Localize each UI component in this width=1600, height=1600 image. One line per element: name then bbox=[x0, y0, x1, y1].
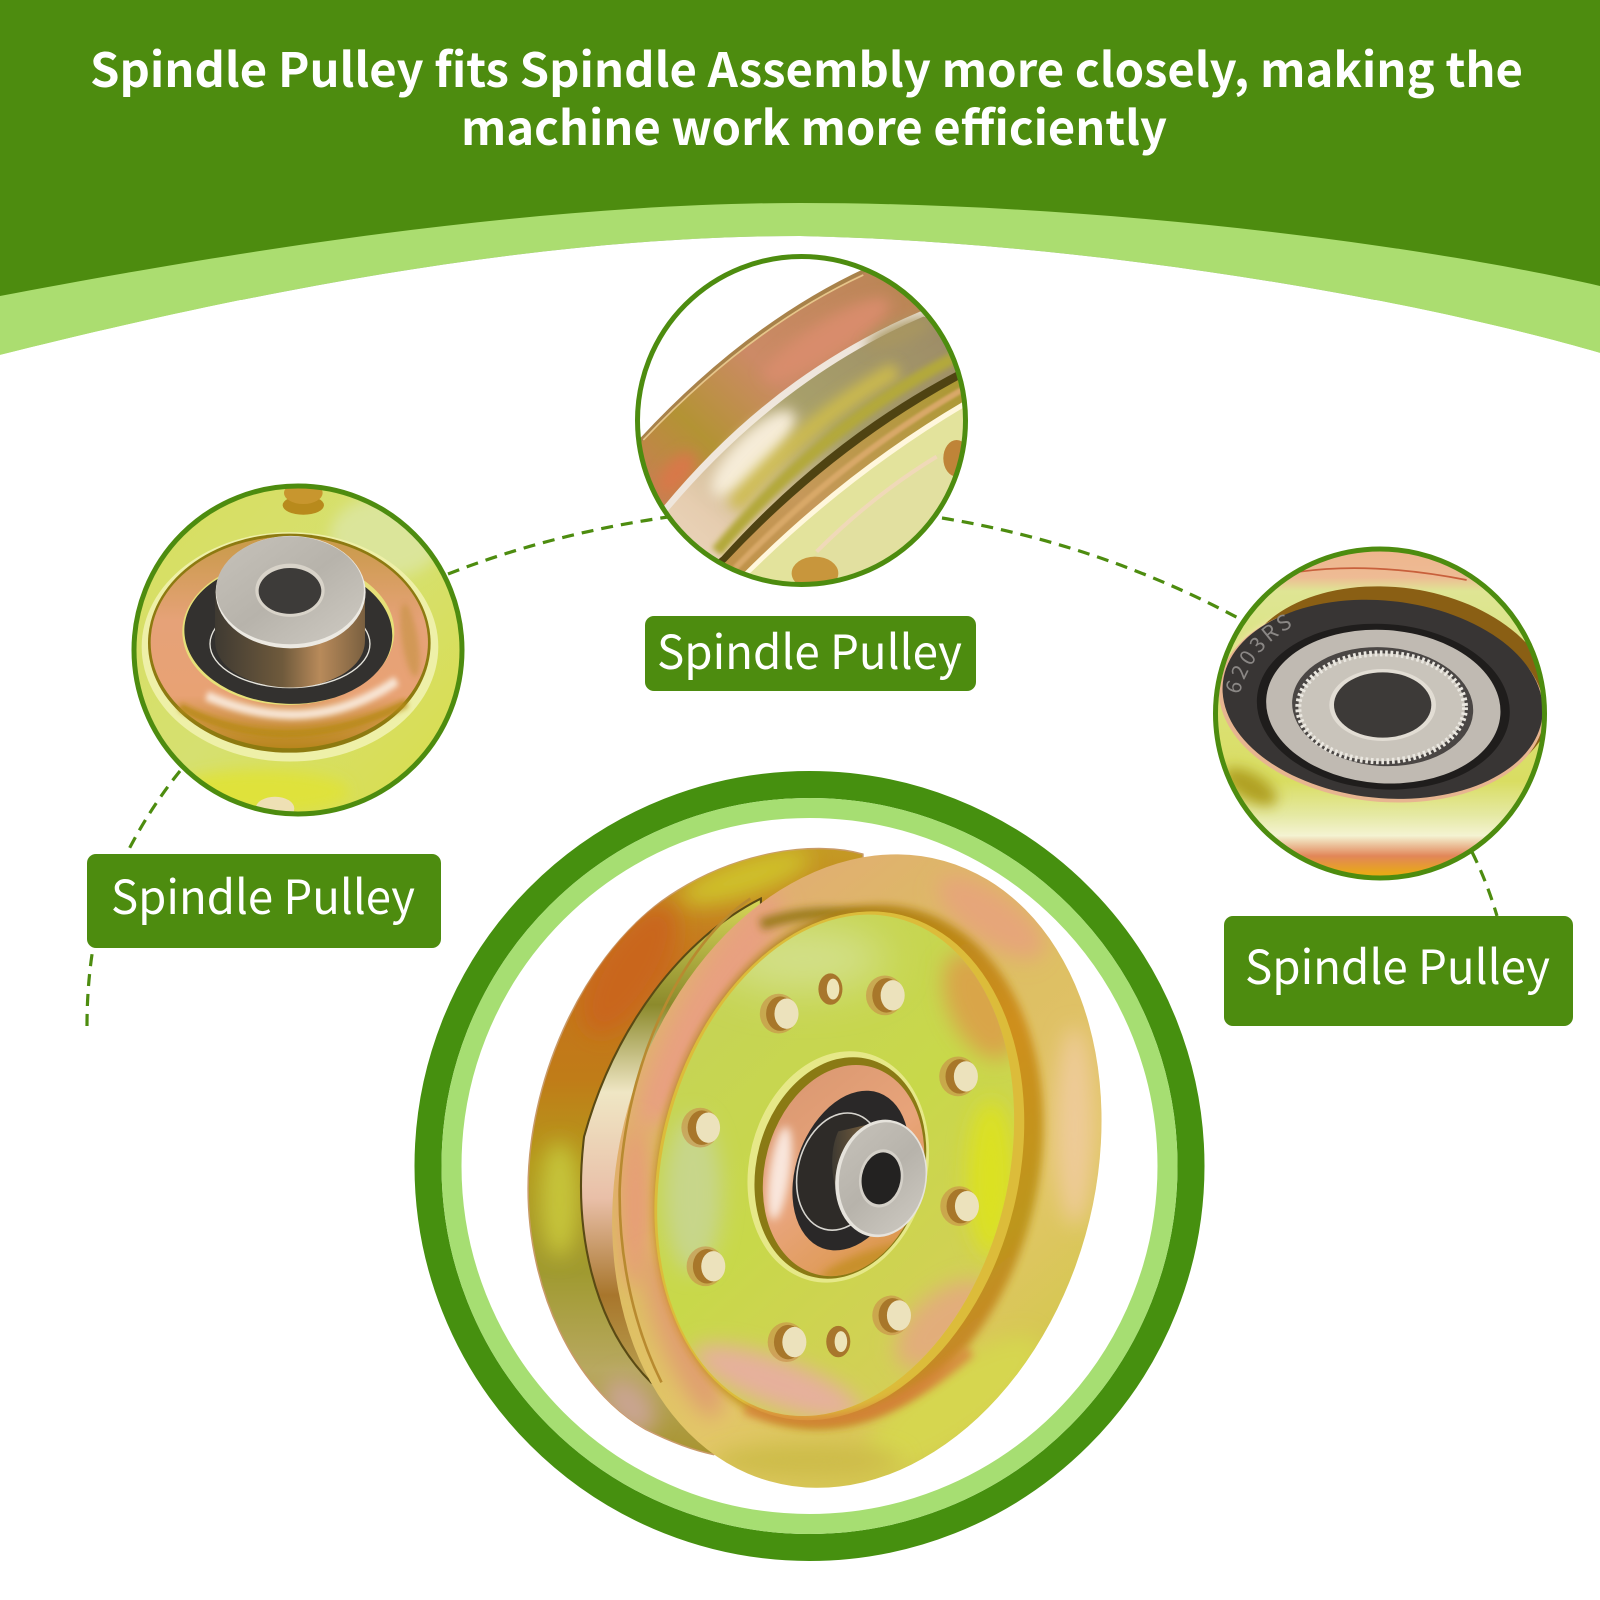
black bearing bbox=[182, 576, 394, 705]
central hub bbox=[748, 1051, 929, 1283]
detail circle: left, hub bbox=[127, 477, 470, 822]
dashed connector arc bbox=[87, 517, 1497, 1026]
bottom rivet bbox=[256, 796, 294, 812]
title bbox=[90, 32, 1523, 159]
label: left bbox=[87, 854, 441, 948]
front flange bbox=[612, 854, 1102, 1488]
silver race bbox=[1266, 630, 1500, 784]
copper hub ring bbox=[142, 532, 438, 762]
title: machine work more efficiently bbox=[461, 90, 1167, 159]
main pulley medallion bbox=[428, 784, 1191, 1548]
small holes bbox=[818, 973, 850, 1357]
label: left: Spindle Pulley bbox=[111, 859, 415, 928]
pulley photo illustration bbox=[527, 848, 1102, 1488]
bearing code bbox=[1239, 612, 1332, 695]
outer dark ring bbox=[428, 784, 1191, 1548]
raised channel bbox=[601, 863, 1097, 1470]
light green swoosh bbox=[0, 203, 1600, 355]
detail circle: right, bearing: 6203RS bbox=[1226, 614, 1291, 692]
detail circle: top, flange edge bbox=[635, 254, 968, 587]
rivets bbox=[681, 975, 979, 1362]
shaft bbox=[210, 536, 370, 688]
rivet fragments bbox=[792, 440, 970, 590]
bore bbox=[1334, 672, 1431, 738]
dark green band bbox=[0, 0, 1600, 300]
back flange bbox=[528, 839, 871, 1455]
title: Spindle Pulley fits Spindle Assembly more closely, making the bbox=[90, 32, 1523, 101]
label: top: Spindle Pulley bbox=[657, 614, 962, 683]
white page curve bbox=[0, 236, 1600, 400]
label: right: Spindle Pulley bbox=[1245, 929, 1550, 998]
inner light ring bbox=[452, 808, 1168, 1524]
header banner bbox=[0, 0, 1600, 400]
detail circle: right, bearing bbox=[1213, 546, 1547, 880]
groove wall bbox=[581, 899, 766, 1382]
label: right bbox=[1224, 916, 1573, 1026]
top rivet bbox=[282, 488, 324, 515]
hub plate bbox=[657, 914, 1014, 1416]
knurled collar bbox=[1298, 653, 1465, 761]
black seal bbox=[1222, 600, 1542, 799]
spindle bbox=[784, 1103, 896, 1240]
